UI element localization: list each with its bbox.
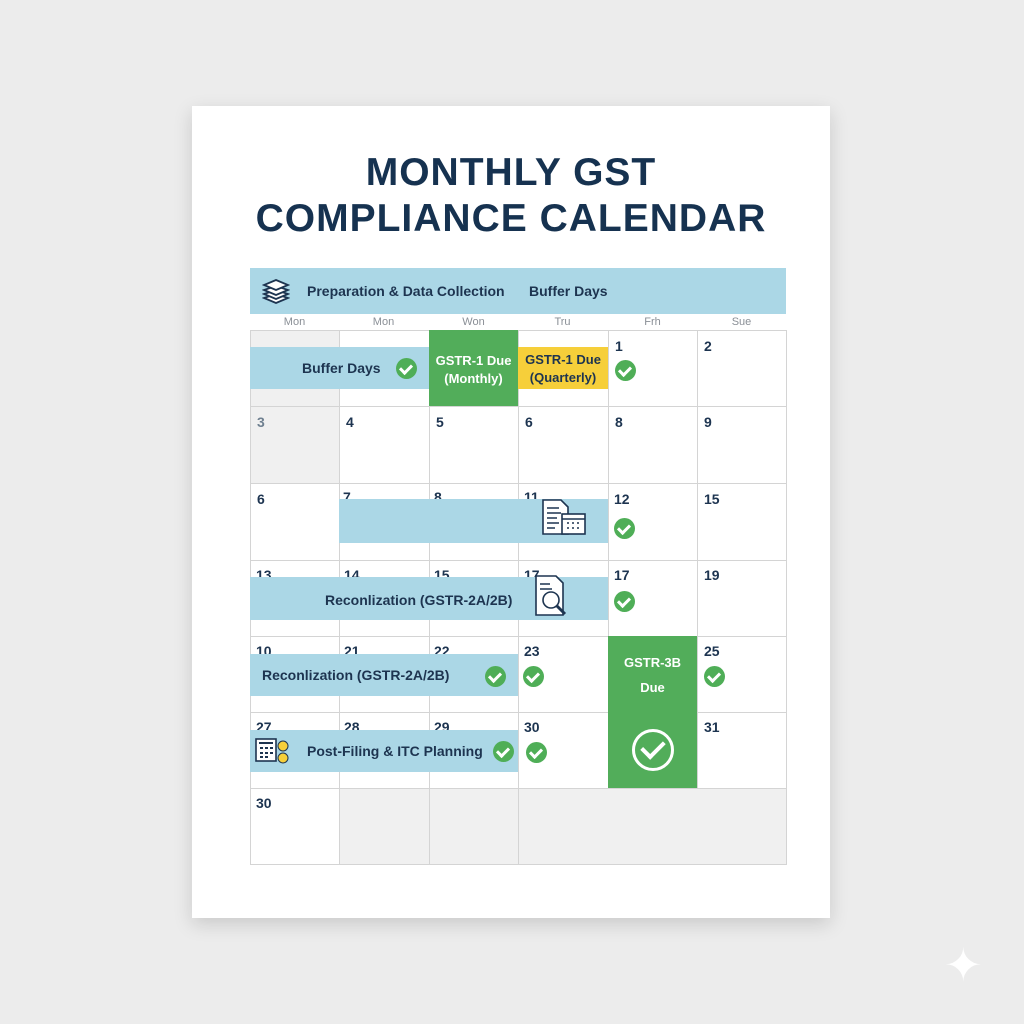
title: MONTHLY GST [366, 151, 656, 194]
text: 30 [524, 719, 540, 735]
icon: sparkle: ✦ [944, 939, 983, 991]
text: Frh [644, 316, 661, 328]
text: 13 [256, 567, 272, 583]
calendar grid [250, 330, 787, 865]
text: 28 [344, 719, 360, 735]
icon: document calendar [542, 499, 586, 535]
text: 27 [256, 719, 272, 735]
text: 17 [524, 567, 540, 583]
event: GSTR-1 quarterly: (Quarterly) [530, 370, 596, 385]
icon: magnifier document [535, 575, 566, 616]
bar: post filing: Post-Filing & ITC Planning [307, 743, 483, 759]
text: Mon [284, 316, 305, 328]
check 25 [704, 666, 725, 687]
check 17 [614, 591, 635, 612]
icon: layers [262, 279, 290, 304]
title: COMPLIANCE CALENDAR [256, 197, 766, 240]
bar: reconciliation row 4 [250, 577, 608, 620]
text: 14 [344, 567, 360, 583]
text: 17 [614, 567, 630, 583]
event: GSTR-1 monthly: GSTR-1 Due [436, 353, 511, 368]
check 1 [615, 360, 636, 381]
event: GSTR-1 monthly: (Monthly) [444, 371, 503, 386]
bar: buffer days: Buffer Days [302, 360, 381, 376]
text: 30 [256, 795, 272, 811]
text: 8 [615, 414, 623, 430]
text: 3 [257, 414, 265, 430]
text: 22 [434, 643, 450, 659]
text: 6 [525, 414, 533, 430]
check 23 [523, 666, 544, 687]
text: 11 [524, 489, 539, 505]
event: GSTR-3B due: GSTR-3B [624, 655, 681, 670]
event: GSTR-1 monthly [429, 330, 518, 406]
text: 15 [434, 567, 450, 583]
bar: reconciliation row 5 [250, 654, 518, 696]
text: 31 [704, 719, 720, 735]
check 12 [614, 518, 635, 539]
text: 2 [704, 338, 712, 354]
weekday labels [284, 316, 751, 328]
bar: row 3 with document calendar icon [339, 499, 608, 543]
day numbers [256, 338, 720, 811]
event: GSTR-1 quarterly [518, 347, 608, 389]
bar: reconciliation row 5: Reconlization (GSTR-2A/2B) [262, 667, 449, 683]
event: GSTR-1 quarterly: GSTR-1 Due [525, 352, 601, 367]
text: 8 [434, 489, 442, 505]
bar: post filing [250, 730, 518, 772]
header legend bar: Preparation & Data Collection [307, 283, 505, 299]
text: 23 [524, 643, 540, 659]
text: Tru [554, 316, 571, 328]
event: GSTR-3B due [608, 636, 697, 712]
text: 5 [436, 414, 444, 430]
text: Sue [732, 316, 751, 328]
bar: reconciliation row 4: Reconlization (GSTR-2A/2B) [325, 592, 512, 608]
text: 19 [704, 567, 720, 583]
text: 10 [256, 643, 272, 659]
text: 21 [344, 643, 360, 659]
text: 29 [434, 719, 450, 735]
text: 1 [615, 338, 623, 354]
text: 25 [704, 643, 720, 659]
title [256, 151, 766, 240]
text: 6 [257, 491, 265, 507]
text: Won [462, 316, 485, 328]
check 30 [526, 742, 547, 763]
text: 15 [704, 491, 720, 507]
paper [192, 106, 830, 918]
event: GSTR-3B due: Due [640, 680, 665, 695]
header legend bar [250, 268, 786, 314]
bar: buffer days [250, 347, 429, 389]
text: 4 [346, 414, 354, 430]
text: Mon [373, 316, 394, 328]
icon: calculator coins [255, 738, 288, 764]
text: 12 [614, 491, 630, 507]
header legend bar: Buffer Days [529, 283, 608, 299]
event: filed check [608, 712, 697, 788]
text: 9 [704, 414, 712, 430]
text: 7 [343, 489, 351, 505]
